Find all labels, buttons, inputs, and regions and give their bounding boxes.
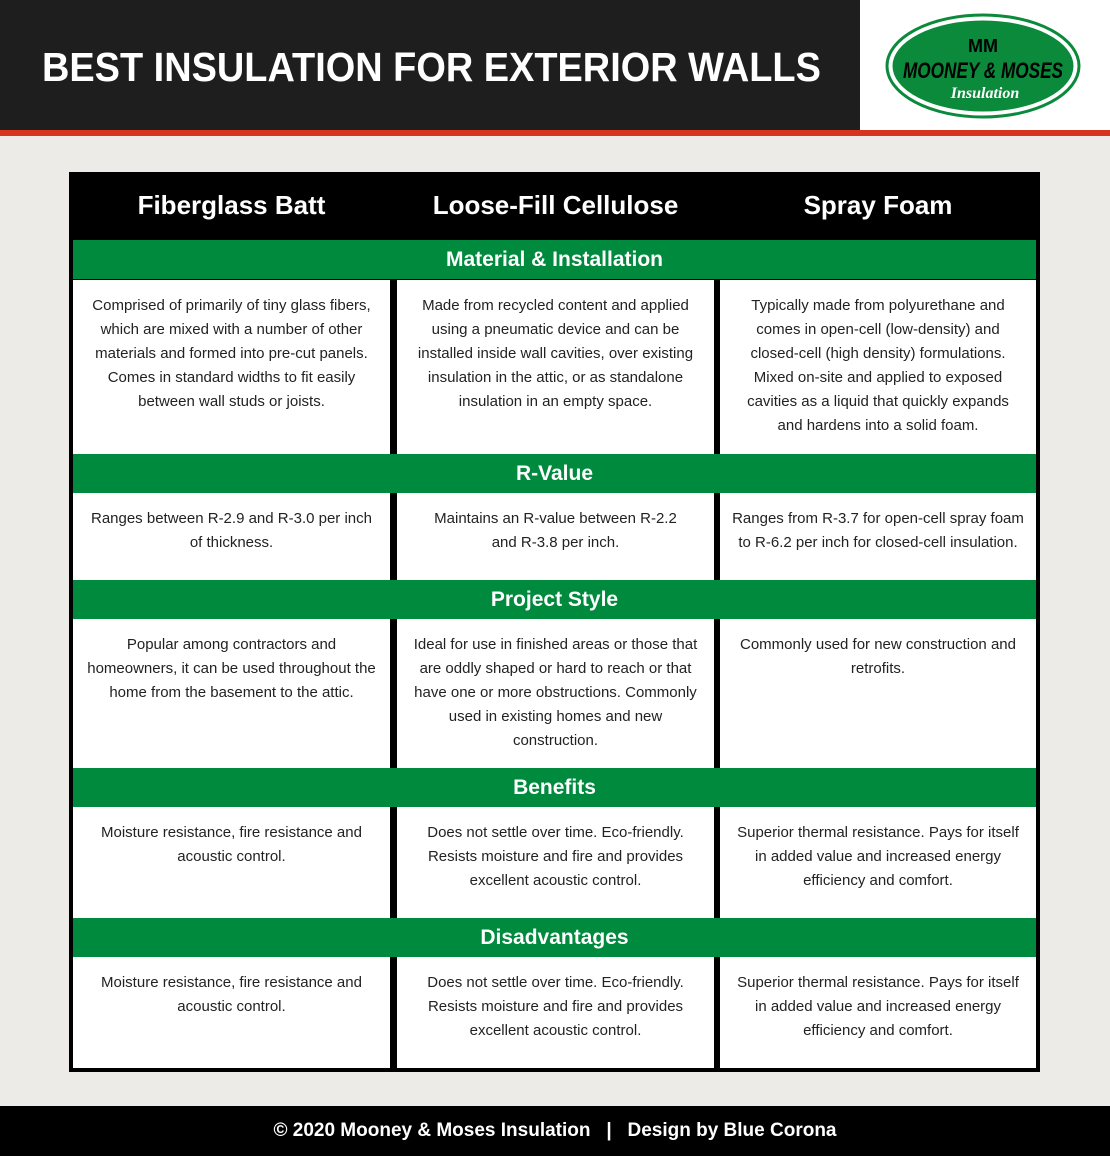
comparison table: Ranges from R-3.7 for open-cell spray foam to R-6.2 per inch for closed-cell insulation. xyxy=(732,510,1024,551)
comparison table: Moisture resistance, fire resistance and acoustic control. xyxy=(101,974,362,1015)
comparison table: Comprised of primarily of tiny glass fibers, which are mixed with a number of other materials and formed into pre-cut panels. Comes in standard widths to fit easily between wall studs or joists. xyxy=(92,297,371,410)
section: disadvantages xyxy=(73,918,1036,957)
comparison table: Superior thermal resistance. Pays for itself in added value and increased energy efficiency and comfort. xyxy=(737,824,1019,889)
logo: MOONEY & MOSES xyxy=(903,58,1063,83)
footer: © 2020 Mooney & Moses Insulation | Design by Blue Corona xyxy=(273,1120,837,1141)
section: material xyxy=(73,240,1036,279)
section: r-value xyxy=(73,454,1036,493)
comparison table: Typically made from polyurethane and comes in open-cell (low-density) and closed-cell (high density) formulations. Mixed on-site and applied to exposed cavities as a liquid that quickly expands and hardens into a solid foam. xyxy=(747,297,1009,434)
comparison table: Ranges between R-2.9 and R-3.0 per inch of thickness. xyxy=(91,510,372,551)
section: benefits: Benefits xyxy=(513,776,596,798)
comparison table: Superior thermal resistance. Pays for itself in added value and increased energy efficiency and comfort. xyxy=(737,974,1019,1039)
title: BEST INSULATION FOR EXTERIOR WALLS xyxy=(42,44,821,90)
column headers: Fiberglass Batt xyxy=(138,190,325,220)
logo: Insulation xyxy=(950,85,1019,102)
comparison table: Made from recycled content and applied using a pneumatic device and can be installed inside wall cavities, over existing insulation in the attic, or as standalone insulation in an empty space. xyxy=(418,297,693,410)
comparison table: Spray Foam xyxy=(804,190,952,220)
section: material: Material & Installation xyxy=(446,248,663,270)
comparison table: Does not settle over time. Eco-friendly. Resists moisture and fire and provides excellent acoustic control. xyxy=(427,824,684,889)
logo xyxy=(860,0,1110,130)
section: benefits xyxy=(73,768,1036,807)
comparison table: Does not settle over time. Eco-friendly. Resists moisture and fire and provides excellent acoustic control. xyxy=(427,974,684,1039)
comparison table: Maintains an R-value between R-2.2 and R-3.8 per inch. xyxy=(434,510,677,551)
comparison table: Moisture resistance, fire resistance and acoustic control. xyxy=(101,824,362,865)
comparison table xyxy=(69,172,1040,1072)
section: r-value: R-Value xyxy=(516,462,593,484)
section: project style xyxy=(73,580,1036,619)
footer xyxy=(0,1106,1110,1156)
section: disadvantages: Disadvantages xyxy=(480,926,629,948)
comparison table: Ideal for use in finished areas or those that are oddly shaped or hard to reach or that have one or more obstructions. Commonly used in existing homes and new construction. xyxy=(414,636,697,749)
header bar xyxy=(0,0,860,130)
section: project style: Project Style xyxy=(491,588,618,610)
comparison table: Commonly used for new construction and retrofits. xyxy=(740,636,1016,677)
comparison table: Loose-Fill Cellulose xyxy=(433,190,678,220)
logo: MM xyxy=(968,36,998,56)
comparison table: Popular among contractors and homeowners, it can be used throughout the home from the basement to the attic. xyxy=(87,636,376,701)
